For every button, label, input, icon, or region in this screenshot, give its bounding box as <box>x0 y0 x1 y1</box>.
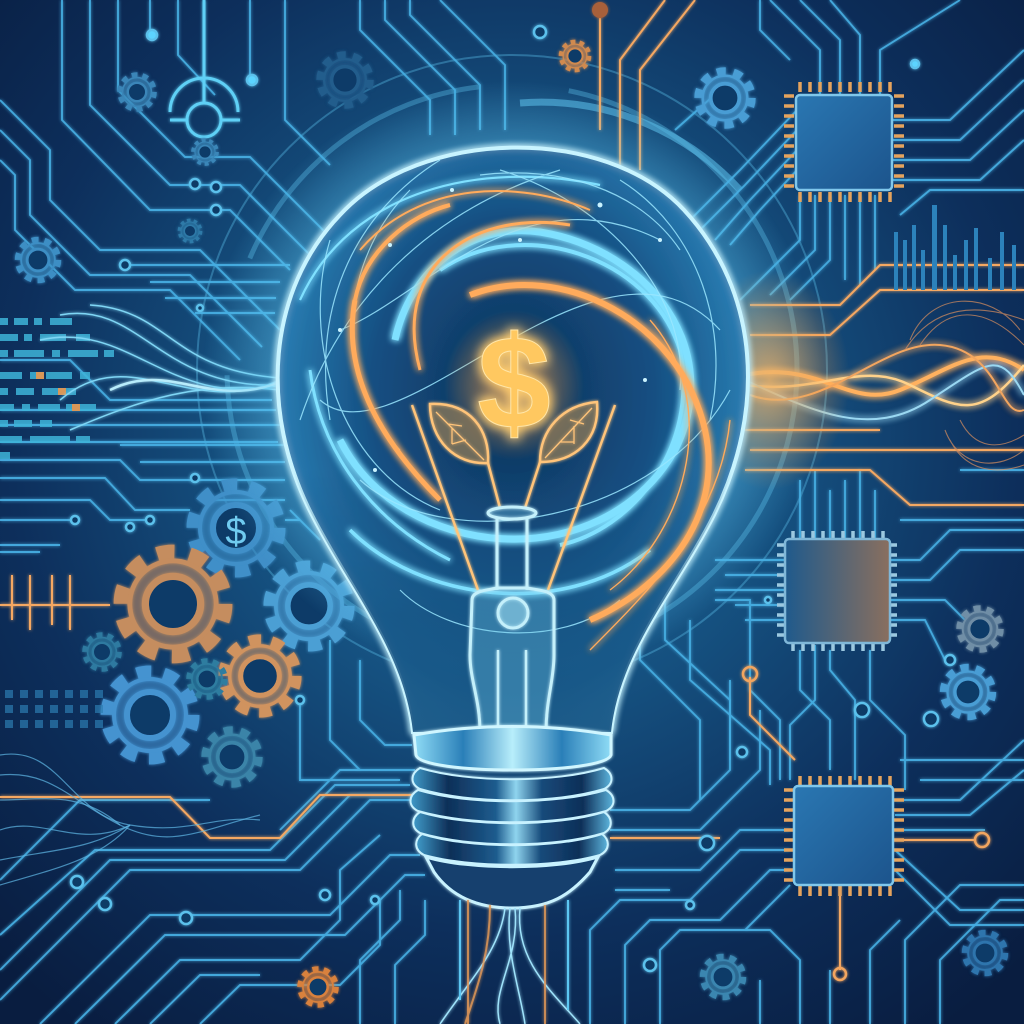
traces: orange left <box>0 575 110 630</box>
data dots: lower left <box>5 690 103 728</box>
traces: bottom center <box>590 680 1024 1024</box>
orange side glow <box>690 270 850 490</box>
gear: bottom orange <box>300 969 336 1005</box>
data bars: left <box>0 318 114 459</box>
gear: top left <box>120 75 154 109</box>
top-left node symbol <box>170 0 240 137</box>
glass body <box>278 148 748 732</box>
gear: top dark <box>321 56 369 104</box>
gear: lower blue <box>206 731 258 783</box>
sparks <box>338 188 662 472</box>
gear: small left <box>85 635 119 669</box>
bulb <box>202 80 850 1024</box>
base tip <box>426 857 598 908</box>
bottom energy wisps <box>440 900 580 1024</box>
gear: small left upper <box>180 220 200 242</box>
gear: blue right <box>270 567 348 645</box>
gear: top right blue <box>699 72 751 124</box>
microchip: middle right <box>777 531 897 651</box>
gear: small orange <box>225 641 295 711</box>
gear: large blue <box>108 673 192 757</box>
swirl: orange <box>352 191 730 650</box>
gear: right blue <box>944 668 992 716</box>
leaf: left <box>430 404 488 463</box>
traces: top left <box>0 0 505 360</box>
gear: left edge <box>18 240 58 280</box>
gear: below node <box>193 140 217 164</box>
filament wires <box>412 405 615 590</box>
glass stem <box>470 507 554 732</box>
traces: orange top <box>600 0 840 970</box>
threads <box>410 768 614 865</box>
wave: lower left <box>0 754 260 885</box>
traces: chip top <box>675 0 1024 540</box>
concentric rings around bulb <box>197 55 827 685</box>
traces: right lower <box>640 470 1024 925</box>
gear: right gray <box>960 609 1000 649</box>
swirl: fine strands <box>300 160 730 633</box>
bar chart: top right <box>894 205 1016 290</box>
bulb halo <box>202 80 822 680</box>
swirl: blue <box>300 177 691 594</box>
wave: left <box>40 305 280 430</box>
wave: right <box>745 345 1024 419</box>
microchip: top right <box>784 82 904 202</box>
dollar sign: $ <box>477 309 551 456</box>
gear: top orange <box>561 42 589 70</box>
gear: large orange <box>123 554 223 654</box>
gear: blue dollar <box>194 486 278 570</box>
leaf: right <box>540 402 597 462</box>
gear: small teal <box>189 661 225 697</box>
traces: left middle <box>0 265 320 552</box>
lower glass shading <box>278 148 748 732</box>
gear: blue dollar: $ <box>225 511 247 553</box>
traces: orange right <box>0 265 1024 840</box>
gear: lower right <box>965 933 1005 973</box>
collar <box>414 726 611 770</box>
screw base <box>410 726 614 908</box>
gear: bottom center <box>703 957 743 997</box>
microchip: lower right <box>784 776 904 896</box>
wave: right mesh <box>905 301 1024 470</box>
dollar glow <box>444 310 584 460</box>
traces: lower left <box>0 640 425 1024</box>
